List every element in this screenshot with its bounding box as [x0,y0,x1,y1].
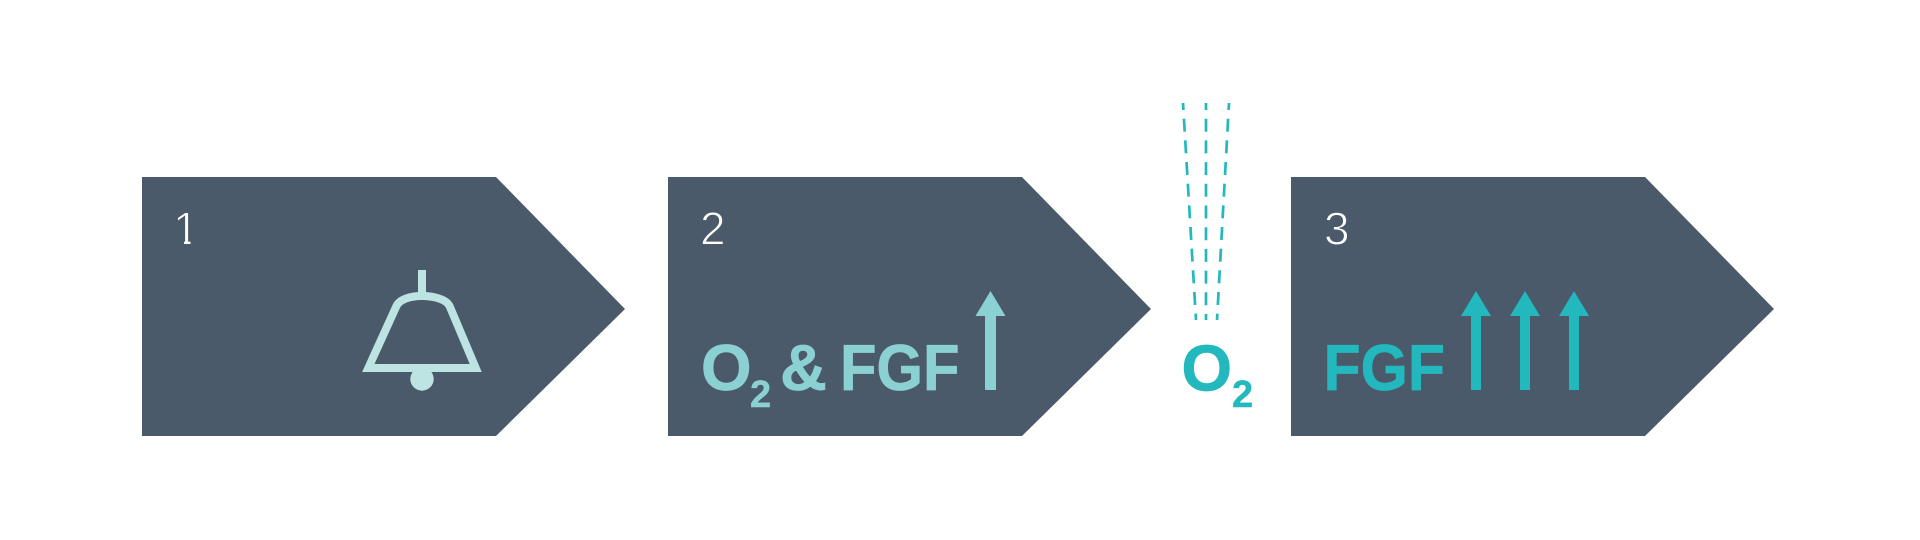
arrows: three up [1461,291,1589,390]
label: O2 and FGF: O [701,331,752,404]
panel: step 2 [668,177,1151,436]
panel shape 3 [1291,177,1774,436]
oxygen diffusion [1182,103,1253,416]
label: O2 and FGF: 2 [750,374,771,416]
label: FGF: FGF [1324,331,1445,404]
panel shape 1 [142,177,625,436]
step number 1: 1 [173,202,199,254]
step number 2: 2 [700,202,726,254]
panel shape 2 [668,177,1151,436]
icon: bell [368,270,476,391]
label: O2 [1182,332,1253,416]
label: O2 and FGF: & [780,331,827,404]
panel: step 3 [1291,177,1774,436]
infographic [142,102,1774,436]
panel: step 1 [142,177,625,436]
label: O2 and FGF [701,331,960,416]
step number 3: 3 [1324,202,1350,254]
label: O2: 2 [1232,374,1253,416]
label: O2 and FGF: FGF [840,331,960,404]
dashed lines [1183,103,1229,320]
arrow: up [976,291,1006,390]
label: O2: O [1182,332,1232,404]
